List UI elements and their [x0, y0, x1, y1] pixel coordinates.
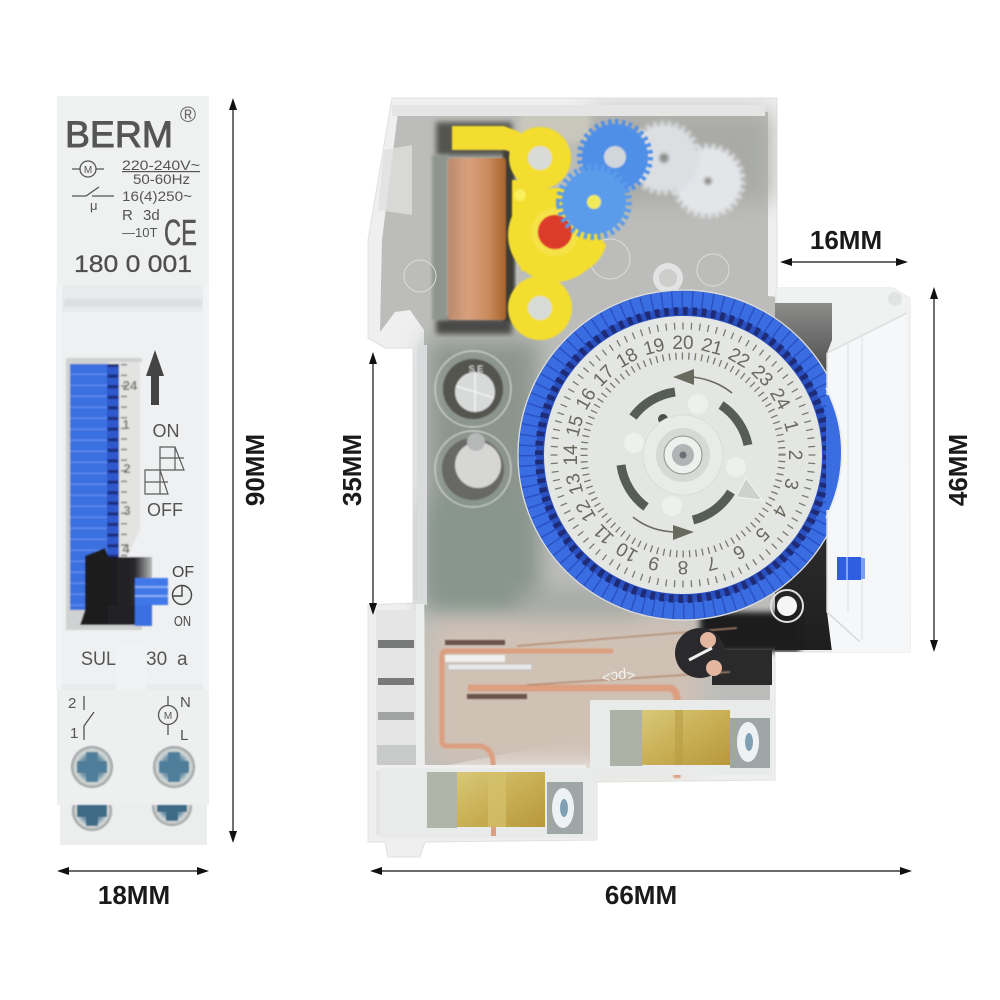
ON label: ON — [152, 421, 180, 441]
blue slider — [135, 578, 168, 605]
relay coil — [448, 158, 506, 320]
hour numbers: 4 — [122, 541, 130, 556]
dial pips — [624, 394, 746, 516]
hour numbers: 11 — [590, 519, 619, 548]
hour numbers: 24 — [123, 378, 138, 393]
terminal symbols: N — [180, 694, 191, 711]
blue slider button — [837, 557, 865, 580]
dark teeth — [539, 311, 827, 599]
ratings text: —10T — [122, 225, 157, 240]
latch on left wall — [378, 145, 412, 215]
dimension: 35MM — [337, 352, 377, 615]
terminal screws — [71, 746, 195, 831]
blue time segments — [70, 364, 110, 610]
hour numbers: 21 — [699, 334, 725, 360]
OFF label: OFF — [147, 500, 183, 520]
dial slots — [621, 392, 748, 520]
motor symbol — [72, 161, 104, 177]
terminal symbols: M — [164, 711, 172, 722]
outer ticks — [554, 326, 812, 584]
dimension: 46MM — [930, 287, 973, 652]
embossed mounting rings — [404, 239, 729, 292]
lower brass clamp — [457, 772, 545, 827]
dial window — [66, 358, 168, 630]
hour numbers: 17 — [589, 361, 619, 391]
ratings text: 220-240V~ — [122, 157, 200, 173]
hour numbers — [561, 333, 805, 577]
dial face — [544, 316, 822, 594]
upper terminal — [590, 700, 772, 775]
hour numbers: 14 — [561, 444, 582, 466]
cover clip — [116, 645, 146, 690]
dimension: 18MM width: 18MM — [98, 880, 170, 910]
dial hub — [643, 415, 723, 495]
hour numbers: 18 — [613, 344, 642, 373]
dimension: 90MM height — [229, 98, 270, 843]
hour numbers: 20 — [672, 333, 694, 354]
rim highlight — [518, 290, 848, 620]
terminal symbols: 2 — [68, 695, 76, 712]
contact symbol: μ — [90, 198, 98, 213]
lower terminal screw — [547, 782, 583, 834]
coil frame shadow — [436, 122, 512, 156]
ratings text: 16(4)250~ — [122, 188, 192, 204]
panel: front view of timer: 30 — [146, 649, 167, 670]
dimension: 18MM width — [57, 867, 209, 910]
hour numbers: 1 — [779, 418, 802, 434]
contact symbol — [72, 187, 114, 213]
mode labels: OF — [172, 564, 194, 581]
mode labels: ON — [174, 613, 191, 630]
panel: front view of timer — [56, 96, 209, 845]
dimension: 66MM width: 66MM — [605, 880, 677, 910]
hour numbers: 4 — [768, 501, 791, 521]
lower terminal — [380, 768, 595, 838]
hour numbers: 5 — [125, 575, 133, 590]
yellow lever and cams — [452, 126, 606, 340]
right transparent cover — [777, 288, 910, 652]
upper terminal screw — [730, 718, 770, 768]
hour numbers: 1 — [122, 417, 130, 432]
hour numbers: 5 — [751, 523, 773, 545]
brand name: BERM — [65, 114, 173, 155]
switch glyph — [145, 447, 184, 494]
dimension: 46MM: 46MM — [943, 434, 973, 506]
hour numbers: 6 — [729, 540, 749, 563]
hour numbers: 13 — [562, 471, 588, 497]
hour numbers: 23 — [747, 361, 777, 391]
copper contact strips — [442, 628, 737, 836]
dimension: 35MM: 35MM — [337, 434, 367, 506]
red gear — [538, 215, 572, 249]
terminal block — [57, 690, 209, 805]
hour numbers: 2 — [123, 461, 131, 476]
scale ticks — [121, 364, 127, 560]
capacitors — [435, 351, 511, 507]
device label plate — [57, 96, 209, 296]
hour numbers: 12 — [572, 496, 601, 525]
black slider block — [80, 548, 134, 625]
motor symbol: M — [84, 165, 92, 176]
ratings text: R — [122, 207, 133, 224]
lower mounting boss — [771, 590, 803, 622]
panel: internal side view of timer — [368, 98, 910, 857]
pointer triangle — [736, 478, 762, 500]
rotation arrow bottom — [633, 517, 694, 540]
housing outline — [368, 98, 910, 857]
blue segments — [528, 300, 838, 610]
hour numbers: 24 — [765, 385, 794, 414]
hour numbers: 15 — [562, 413, 588, 439]
transparent cover — [56, 285, 209, 690]
model code: SUL — [81, 649, 116, 670]
hour numbers: 19 — [641, 334, 667, 360]
capacitors: S E — [469, 364, 483, 374]
ratings text: 50-60Hz — [133, 171, 190, 187]
CE mark: CE — [164, 212, 197, 253]
dial ring bulge — [826, 395, 841, 510]
dimension: 16MM: 16MM — [810, 225, 882, 255]
up arrow — [146, 350, 164, 405]
hour numbers: 2 — [784, 450, 805, 460]
mode labels — [172, 564, 194, 630]
panel: front view of timer: a — [177, 649, 188, 670]
hour numbers — [122, 378, 138, 590]
left rail slots — [376, 604, 586, 835]
dimension: 16MM — [780, 225, 908, 266]
device lower body — [60, 800, 207, 845]
inner ticks — [584, 356, 782, 554]
hour numbers: 22 — [724, 344, 753, 373]
hour numbers: 16 — [572, 385, 601, 414]
hour numbers: 7 — [704, 551, 720, 574]
model number: 180 0 001 — [74, 251, 192, 278]
embossed mark: <pc> — [601, 666, 636, 686]
registered mark: ® — [180, 102, 196, 127]
dimension: 66MM width — [370, 867, 912, 910]
rim strips — [392, 105, 765, 116]
hour numbers: 9 — [646, 551, 662, 574]
hour numbers: 8 — [678, 556, 688, 577]
terminal symbols — [68, 694, 191, 744]
dimension: 90MM height: 90MM — [240, 434, 270, 506]
blue gears — [560, 122, 650, 236]
varistor disk — [675, 628, 725, 678]
terminal symbols: 1 — [70, 725, 78, 742]
interior shading — [380, 105, 832, 770]
time dial — [518, 290, 848, 620]
ratings text — [122, 157, 200, 240]
rotation arrow top — [673, 369, 732, 393]
hour numbers: 3 — [779, 476, 802, 492]
terminal symbols: L — [180, 727, 188, 744]
ratings text: 3d — [143, 207, 160, 224]
hour numbers: 3 — [123, 503, 131, 518]
upper brass clamp — [642, 710, 730, 765]
white gears — [629, 123, 743, 216]
hour numbers: 10 — [613, 537, 642, 566]
